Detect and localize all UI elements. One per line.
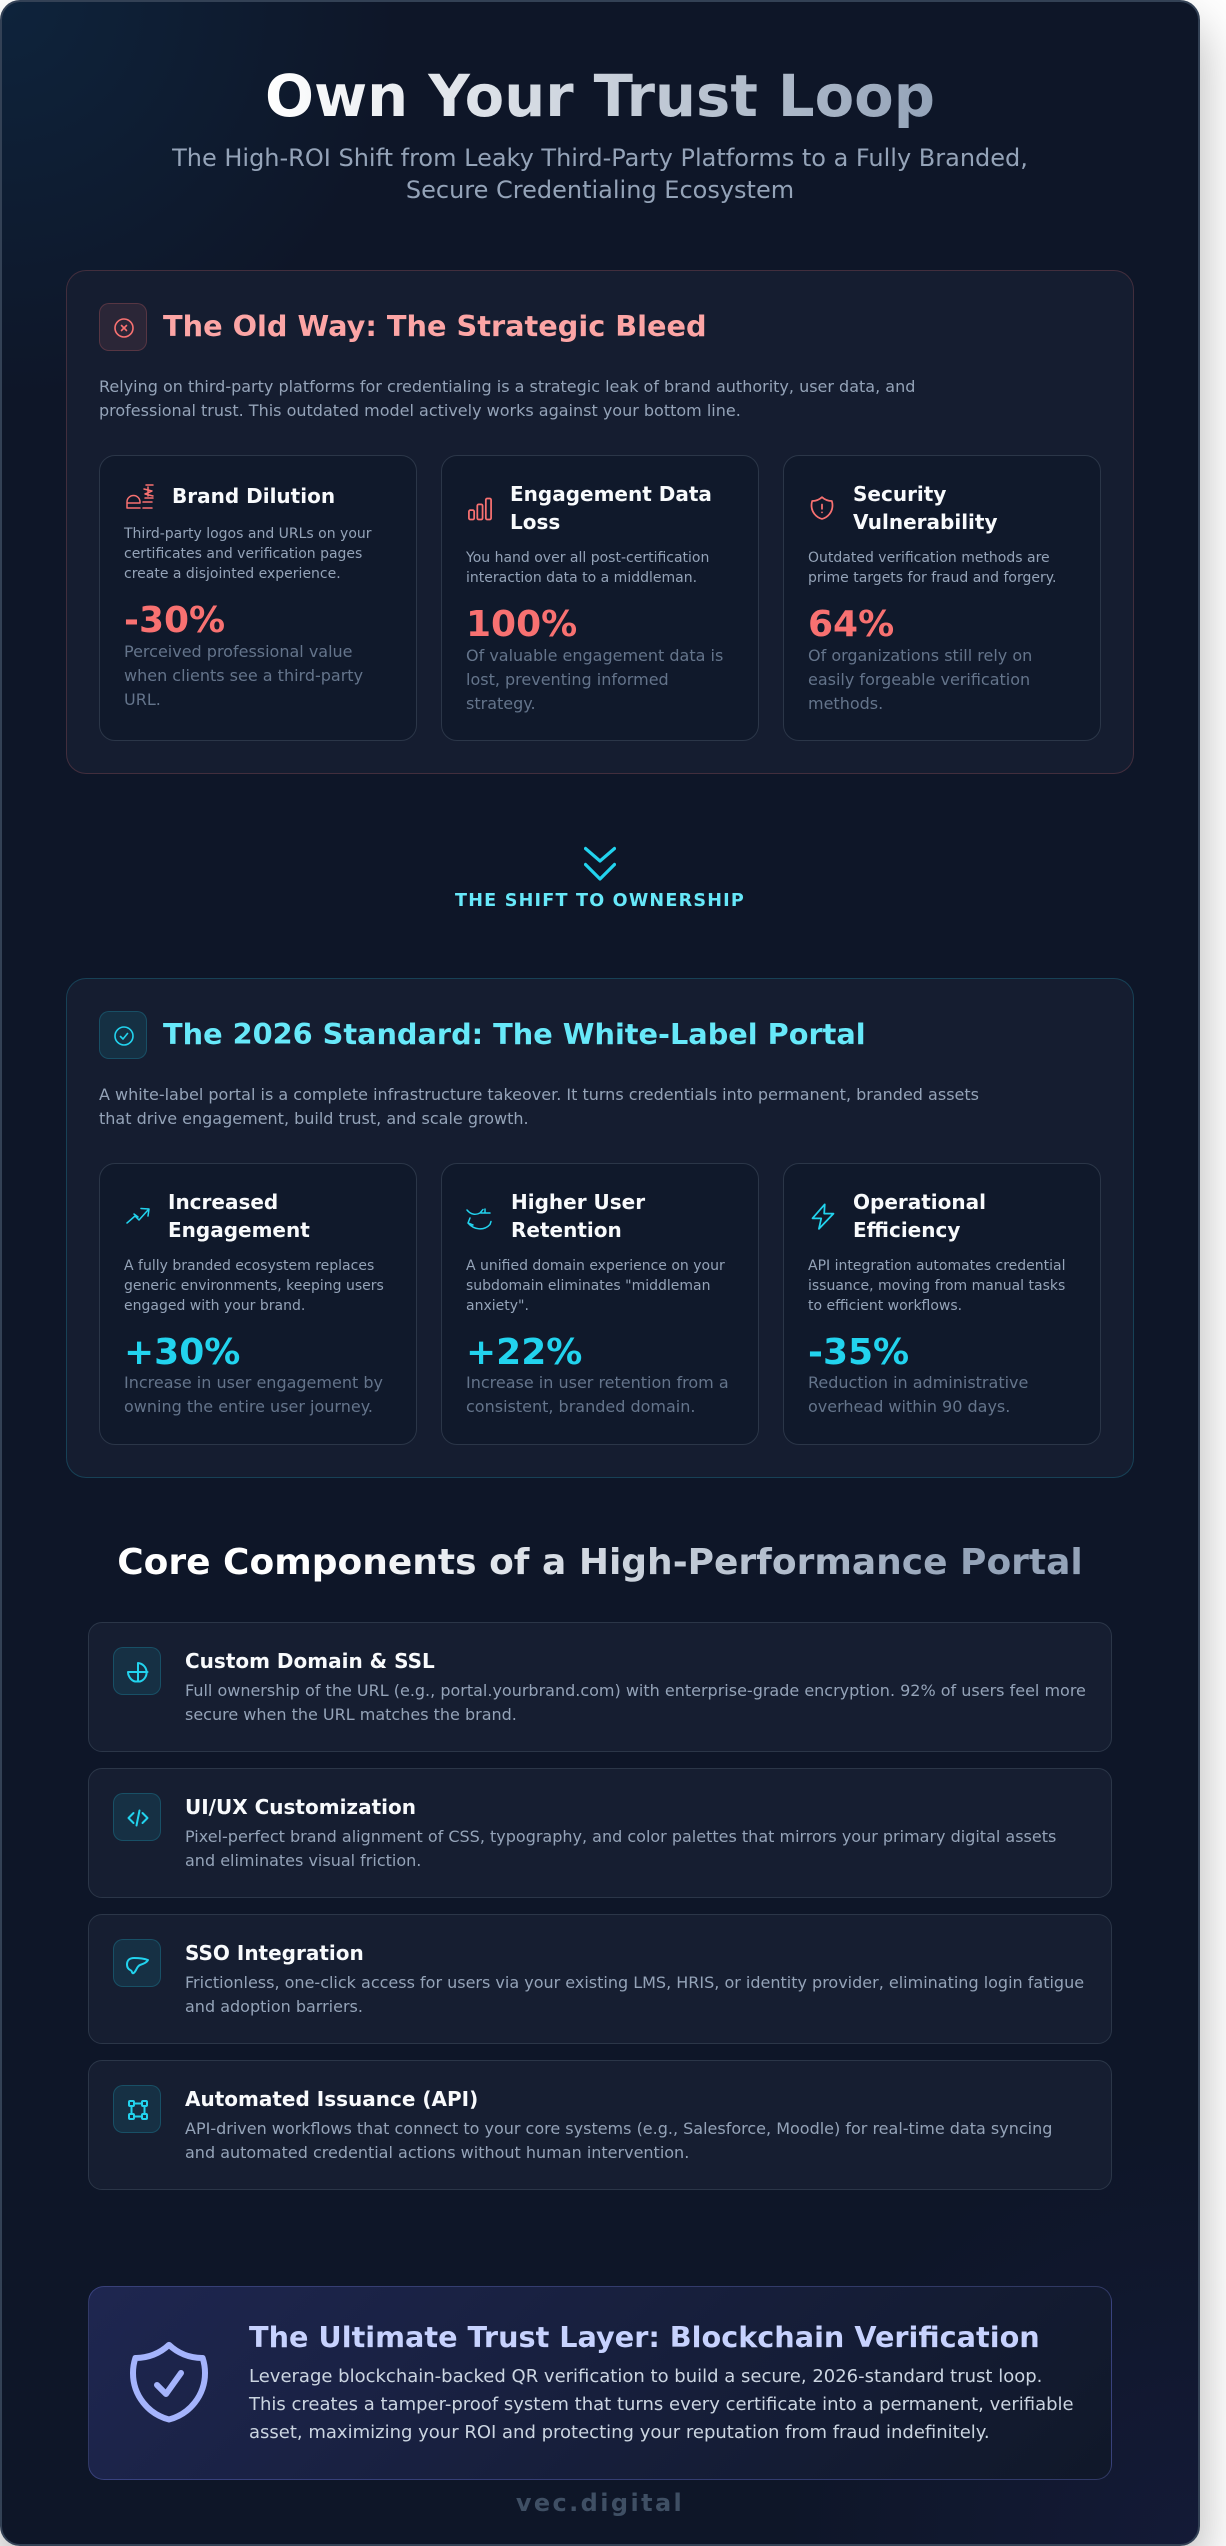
card: engagement data loss (441, 455, 759, 741)
card title (853, 482, 998, 534)
card title (853, 1190, 986, 1242)
2026 standard description: that drive engagement, build trust, and scale growth. (99, 1109, 529, 1128)
card title (510, 482, 712, 534)
stat description (124, 1373, 383, 1416)
component description: Full ownership of the URL (e.g., portal.yourbrand.com) with enterprise-grade encryption. 92% of users feel more (185, 1681, 1086, 1700)
card description (466, 550, 709, 586)
card title (511, 1190, 646, 1242)
card description: subdomain eliminates "middleman (466, 1278, 710, 1294)
component description: API-driven workflows that connect to your core systems (e.g., Salesforce, Moodle) for real-time data syncing (185, 2119, 1052, 2138)
stat description: when clients see a third-party (124, 666, 363, 685)
component description: secure when the URL matches the brand. (185, 1705, 517, 1724)
component: custom domain (88, 1622, 1112, 1752)
stat: -35% (808, 1332, 909, 1373)
icon: code (113, 1793, 161, 1841)
card description (124, 526, 372, 582)
component description (185, 1681, 1086, 1724)
card description: engaged with your brand. (124, 1298, 305, 1314)
card title: Vulnerability (853, 510, 998, 534)
card title: Retention (511, 1218, 622, 1242)
icon: check circle (99, 1011, 147, 1059)
stat: 64% (808, 604, 894, 645)
card description: interaction data to a middleman. (466, 570, 697, 586)
card description: A fully branded ecosystem replaces (124, 1258, 374, 1274)
subtitle: The High-ROI Shift from Leaky Third-Party Platforms to a Fully Branded, (172, 144, 1028, 172)
card description: create a disjointed experience. (124, 566, 341, 582)
icon: trending up (126, 1208, 150, 1224)
subtitle (172, 144, 1028, 204)
heading: core components: Core Components of a High-Performance Portal (117, 1542, 1083, 1583)
card title: Security (853, 482, 946, 506)
panel: the old way (66, 270, 1134, 774)
icon: sso (113, 1939, 161, 1987)
title: Own Your Trust Loop (265, 63, 935, 130)
card: brand dilution (99, 455, 417, 741)
stat description: owning the entire user journey. (124, 1397, 373, 1416)
stat description: methods. (808, 694, 883, 713)
card description (808, 1258, 1066, 1314)
icon: brand dilution (126, 484, 154, 509)
stat description: overhead within 90 days. (808, 1397, 1010, 1416)
component title: Automated Issuance (API) (185, 2087, 478, 2111)
stat description: strategy. (466, 694, 536, 713)
stat description: Increase in user retention from a (466, 1373, 729, 1392)
icon: shield check (130, 2342, 208, 2422)
component description: Frictionless, one-click access for users via your existing LMS, HRIS, or identity provider, eliminating login fatigue (185, 1973, 1084, 1992)
stat description: Increase in user engagement by (124, 1373, 383, 1392)
card title: Engagement (168, 1218, 310, 1242)
stat: +22% (466, 1332, 582, 1373)
card: increased engagement (99, 1163, 417, 1445)
stat: -30% (124, 600, 225, 641)
heading: the 2026 standard: The 2026 Standard: The White-Label Portal (163, 1017, 866, 1051)
icon: lightning bolt (812, 1204, 834, 1230)
card title: Engagement Data (510, 482, 712, 506)
stat description: consistent, branded domain. (466, 1397, 695, 1416)
stat description: Reduction in administrative (808, 1373, 1028, 1392)
card description: You hand over all post-certification (466, 550, 709, 566)
component description: and adoption barriers. (185, 1997, 363, 2016)
icon: x circle (99, 303, 147, 351)
stat description (808, 1373, 1028, 1416)
icon: retention arrows (466, 1208, 492, 1230)
card: security vulnerability (783, 455, 1101, 741)
callout: blockchain verification (88, 2286, 1112, 2480)
callout text: This creates a tamper-proof system that turns every certificate into a permanent, verifiable (249, 2394, 1074, 2415)
card description: to efficient workflows. (808, 1298, 962, 1314)
stat description: Of organizations still rely on (808, 646, 1032, 665)
callout text: Leverage blockchain-backed QR verification to build a secure, 2026-standard trust loop. (249, 2366, 1042, 2387)
stat: +30% (124, 1332, 240, 1373)
card title: Efficiency (853, 1218, 960, 1242)
stat: 100% (466, 604, 577, 645)
callout text (248, 2366, 1074, 2443)
2026 standard description (99, 1085, 979, 1128)
card description (808, 550, 1057, 586)
component description (185, 1827, 1056, 1870)
stat description (808, 646, 1032, 713)
panel: the 2026 standard (66, 978, 1134, 1478)
component: ui/ux customization (88, 1768, 1112, 1898)
stat description: Perceived professional value (124, 642, 353, 661)
component title: UI/UX Customization (185, 1795, 416, 1819)
card description (466, 1258, 725, 1314)
card title (168, 1190, 310, 1242)
card description: prime targets for fraud and forgery. (808, 570, 1057, 586)
card description: generic environments, keeping users (124, 1278, 384, 1294)
old way description: Relying on third-party platforms for credentialing is a strategic leak of brand authority, user data, and (99, 377, 915, 396)
subtitle: Secure Credentialing Ecosystem (406, 176, 794, 204)
2026 standard description: A white-label portal is a complete infrastructure takeover. It turns credentials into permanent, branded assets (99, 1085, 979, 1104)
card title: Operational (853, 1190, 986, 1214)
card: higher user retention (441, 1163, 759, 1445)
callout text: asset, maximizing your ROI and protecting your reputation from fraud indefinitely. (249, 2422, 990, 2443)
shift label: THE SHIFT TO OWNERSHIP (455, 891, 745, 911)
callout heading: The Ultimate Trust Layer: Blockchain Verification (249, 2320, 1040, 2354)
component title: Custom Domain & SSL (185, 1649, 435, 1673)
component description: and eliminates visual friction. (185, 1851, 421, 1870)
card description: API integration automates credential (808, 1258, 1066, 1274)
arrow: double chevron (584, 846, 616, 881)
stat description: lost, preventing informed (466, 670, 669, 689)
component title: SSO Integration (185, 1941, 364, 1965)
card description: Outdated verification methods are (808, 550, 1050, 566)
card description (124, 1258, 384, 1314)
stat description (124, 642, 363, 709)
card title: Increased (168, 1190, 278, 1214)
component: sso integration (88, 1914, 1112, 2044)
component description (185, 2119, 1052, 2162)
card: operational efficiency (783, 1163, 1101, 1445)
brand footer: vec.digital (516, 2489, 684, 2517)
component description (185, 1973, 1084, 2016)
component description: and automated credential actions without human intervention. (185, 2143, 689, 2162)
component: automated issuance (88, 2060, 1112, 2190)
component description: Pixel-perfect brand alignment of CSS, typography, and color palettes that mirrors your primary digital assets (185, 1827, 1056, 1846)
card title: Loss (510, 510, 560, 534)
heading: the old way: The Old Way: The Strategic Bleed (163, 309, 707, 343)
stat description: Of valuable engagement data is (466, 646, 723, 665)
icon: domain (113, 1647, 161, 1695)
stat description: easily forgeable verification (808, 670, 1030, 689)
old way description: professional trust. This outdated model actively works against your bottom line. (99, 401, 741, 420)
stat description: URL. (124, 690, 161, 709)
card description: Third-party logos and URLs on your (124, 526, 372, 542)
card description: anxiety". (466, 1298, 529, 1314)
stat description (466, 1373, 729, 1416)
stat description (466, 646, 723, 713)
icon: api nodes (113, 2085, 161, 2133)
card description: certificates and verification pages (124, 546, 362, 562)
icon: bar chart (468, 498, 492, 520)
icon: shield exclamation (810, 496, 834, 520)
card description: issuance, moving from manual tasks (808, 1278, 1065, 1294)
card title: Brand Dilution (172, 484, 335, 508)
card description: A unified domain experience on your (466, 1258, 725, 1274)
card title: Higher User (511, 1190, 645, 1214)
old way description (99, 377, 915, 420)
